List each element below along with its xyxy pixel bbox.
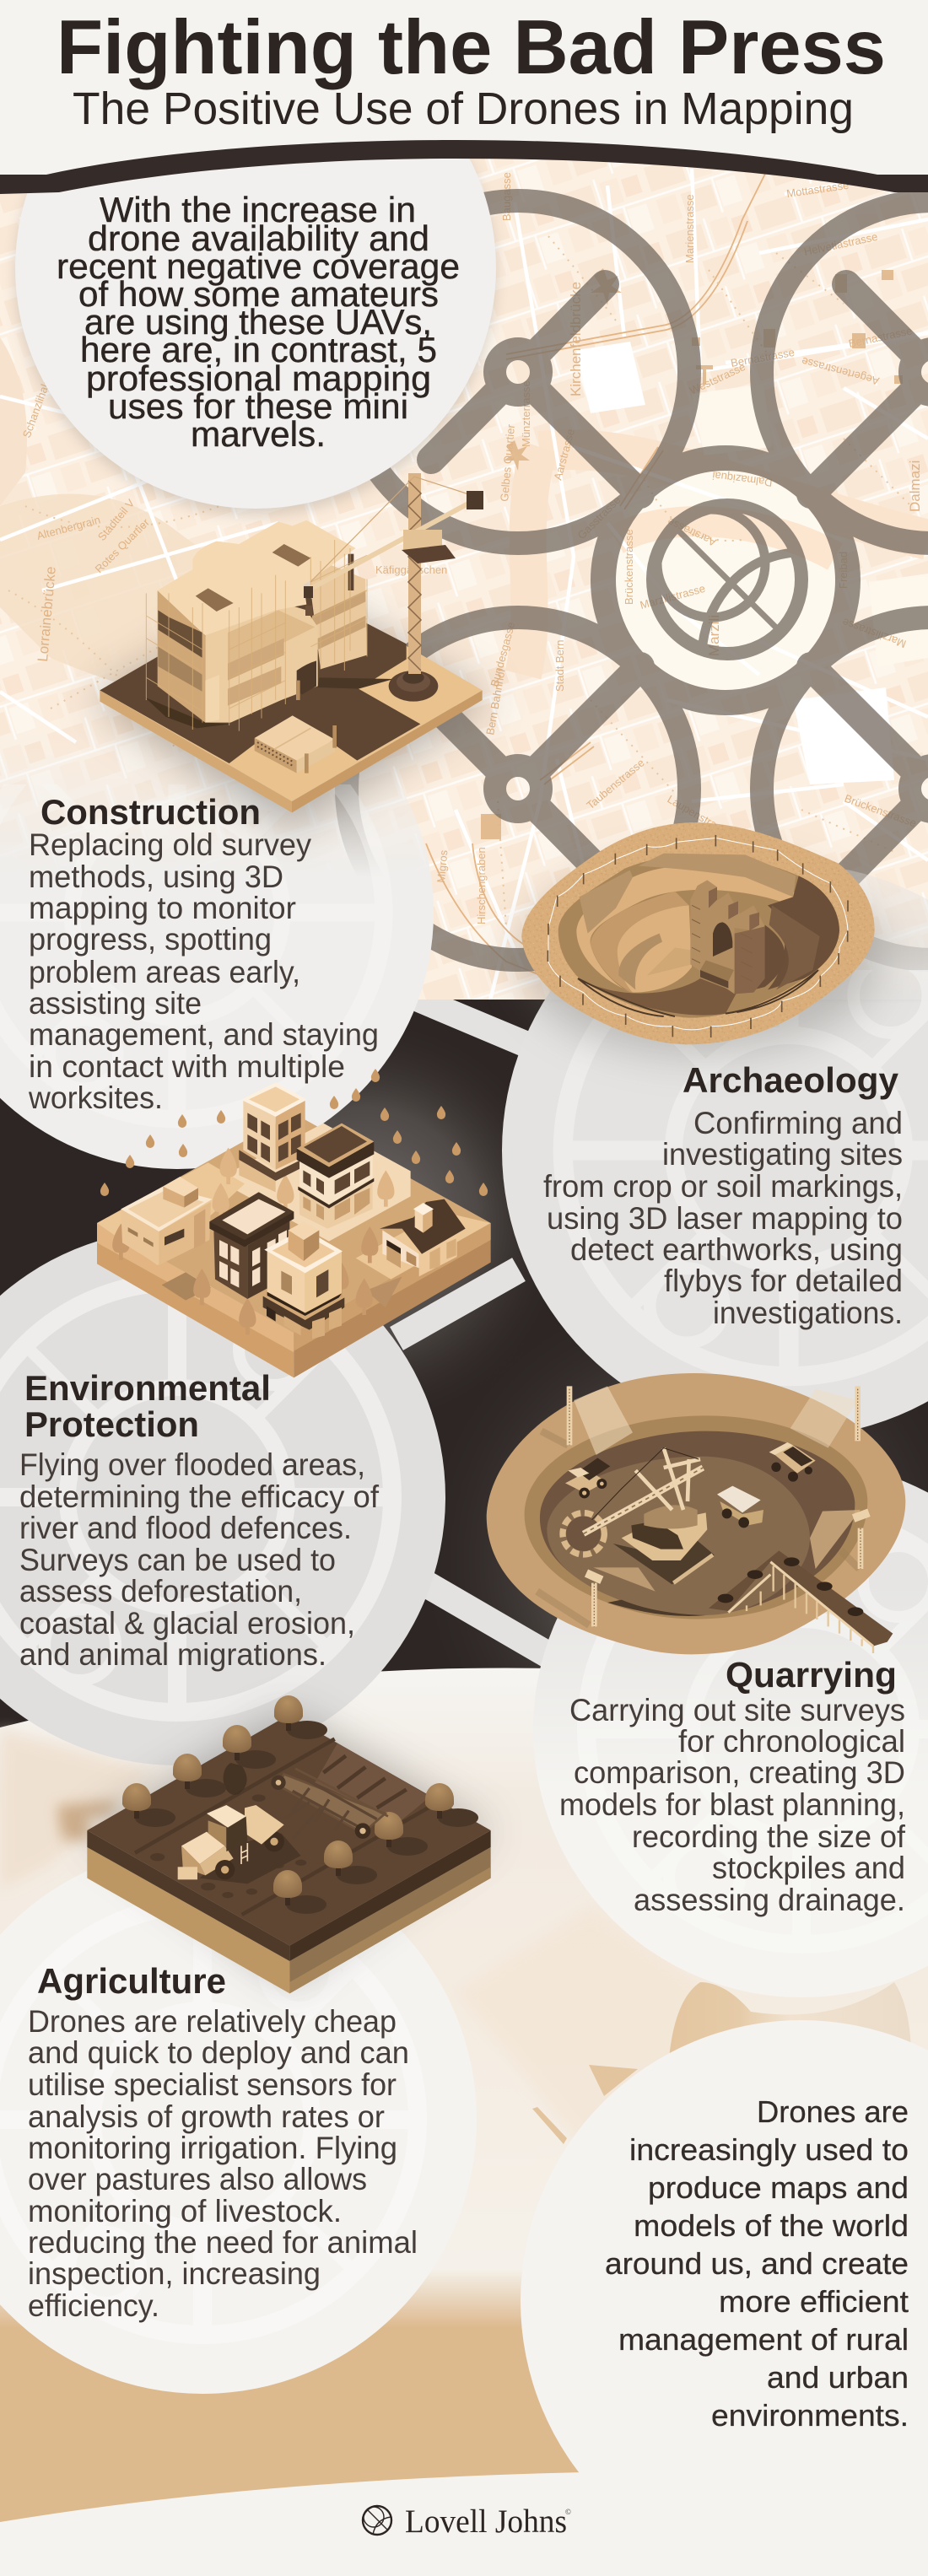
illustration: flooded city [97,1069,491,1377]
environmental protection body text [19,1447,380,1672]
raindrops [100,1069,488,1196]
quarrying body text [559,1693,906,1917]
archaeology body text: using 3D laser mapping to [547,1201,903,1236]
agriculture body text: efficiency. [28,2288,159,2323]
construction body text: progress, spotting [29,922,272,957]
tractor [178,1805,284,1879]
construction body text: problem areas early, [29,955,300,989]
city map backdrop: Laupenstrasse [665,793,734,839]
city map backdrop: Freibad [837,552,850,589]
quarrying body text: stockpiles and [712,1851,905,1885]
closing statement text: models of the world [634,2208,909,2243]
closing statement text: around us, and create [605,2246,909,2281]
city map backdrop: Aarstrasse [551,428,577,482]
closing statement text: increasingly used to [629,2132,909,2167]
environmental protection body text: determining the efficacy of [19,1479,380,1514]
city map backdrop: Altenbergrain [35,513,101,542]
city map backdrop: Käfiggässchen [375,563,447,576]
city map backdrop: Brückenstrasse [623,529,635,605]
environmental protection body text: river and flood defences. [19,1511,352,1545]
city map backdrop: Dalmaziquai [711,469,773,489]
quarrying body text: comparison, creating 3D [574,1755,905,1790]
intro text: here are, in contrast, 5 [80,330,437,369]
city map backdrop: Gasstrasse [575,493,623,542]
environmental protection heading [24,1368,271,1444]
construction body text: mapping to monitor [29,891,296,925]
city map backdrop: Kirchenfeldbrücke [568,282,584,396]
building: tall tower [239,1082,306,1192]
city map backdrop: Rotes Quartier [93,515,152,575]
quarrying heading: Quarrying [726,1655,897,1695]
archaeology body text: flybys for detailed [664,1264,903,1298]
intro text [57,190,460,454]
environmental protection heading: Environmental [24,1368,271,1408]
logo: Lovell Johns: © [565,2508,571,2516]
illustration: archaeological dig [519,822,882,1054]
quarrying body text: Carrying out site surveys [569,1693,905,1727]
city map backdrop: Aegertenstrasse [800,355,881,388]
intro text: of how some amateurs [78,274,439,314]
dark central section [0,1000,928,1847]
closing statement text: Drones are [757,2094,909,2129]
intro text: uses for these mini [108,386,408,426]
intro text: recent negative coverage [57,246,460,286]
city map backdrop: Marzilistrasse [639,582,707,612]
archaeology body text: from crop or soil markings, [543,1169,903,1204]
agriculture body text: monitoring of livestock. [28,2194,342,2228]
building: front block [263,1221,344,1339]
quarrying body text: assessing drainage. [634,1883,905,1917]
panel: quarrying circle [533,1461,928,1997]
city map backdrop: Dalmazi [907,461,923,512]
header panel above the curve [0,0,928,175]
city map backdrop: Marzilistrasse [840,616,908,650]
construction body text: methods, using 3D [29,860,283,894]
construction body text: assisting site [29,986,202,1021]
city map backdrop: Bernastrasse [848,324,914,350]
panel: closing statement circle [521,2020,928,2576]
archaeology body text: Confirming and [693,1106,903,1140]
city map backdrop: Lorrainebrücke [35,566,59,662]
city map backdrop: Migros [434,849,450,883]
bottom footer band [0,2472,928,2576]
drone silhouette over the map [347,201,928,960]
intro text: drone availability and [88,218,429,258]
environmental protection body text: Surveys can be used to [19,1543,336,1577]
construction body text: management, and staying [29,1017,379,1052]
panel: construction circle [0,773,434,1169]
panel: agriculture circle [0,1846,477,2394]
archaeology body text: detect earthworks, using [570,1232,903,1267]
city map backdrop: Mottastrasse [785,179,850,200]
closing statement text: environments. [711,2398,909,2433]
closing statement text: produce maps and [648,2170,909,2205]
intro text: marvels. [191,414,326,454]
floodlight towers [569,1386,869,1626]
lower cream section with aerial photo wash [0,1668,928,2576]
agriculture body text: reducing the need for animal [28,2225,418,2260]
city map backdrop: Bernastrasse [730,346,796,369]
intro text: are using these UAVs, [84,302,432,342]
construction body text: worksites. [28,1081,163,1115]
illustration: construction site [91,473,491,831]
panel: intro circle [15,28,496,515]
city map backdrop: Schanzlihalde [20,371,56,439]
agriculture body text: utilise specialist sensors for [28,2067,397,2102]
excavator [563,1448,715,1584]
harrow [271,1769,388,1839]
illustration: agricultural field [87,1695,491,1993]
construction heading: Construction [40,792,261,832]
closing statement text: and urban [767,2360,909,2395]
agriculture body text: monitoring irrigation. Flying [28,2131,397,2165]
agriculture body text: Drones are relatively cheap [28,2004,397,2039]
archaeology body text [543,1106,903,1330]
quarrying body text: recording the size of [632,1819,906,1854]
city map backdrop: Bundesgasse [488,621,517,688]
archaeology body text: investigations. [713,1296,903,1330]
building: dark roof block [297,1124,374,1229]
city map backdrop: Gelbes Quartier [498,423,517,502]
environmental protection body text: coastal & glacial erosion, [19,1606,355,1641]
city map backdrop: Aarstrasse [666,515,718,549]
agriculture body text: and quick to deploy and can [28,2035,409,2070]
quarrying body text: for chronological [678,1724,905,1759]
construction body text [28,827,379,1115]
city map backdrop: Bern Bahnhof [483,667,508,736]
city map backdrop: Baugasse [500,172,513,221]
quarrying body text: models for blast planning, [559,1787,905,1822]
building: dark frame block [209,1192,294,1299]
city map backdrop: Münzterrasse [520,380,532,447]
environmental protection body text: and animal migrations. [19,1637,326,1672]
subtitle: The Positive Use of Drones in Mapping [73,84,854,134]
city map backdrop: Stadtteil V [95,497,138,543]
city map backdrop: Helvetiastrasse [803,230,879,258]
environmental protection body text: Flying over flooded areas, [19,1447,365,1482]
construction body text: in contact with multiple [29,1049,345,1084]
dark curved divider [0,140,928,194]
floodlight beams [537,1386,861,1625]
environmental protection body text: assess deforestation, [19,1574,302,1609]
city map backdrop: Hirschengraben [475,847,488,924]
city map backdrop: Weststrasse [688,360,747,397]
mining trucks [565,1442,816,1528]
intro text: professional mapping [86,358,431,398]
intro text: With the increase in [100,190,416,229]
city map backdrop: Brückenstrasse [843,792,918,829]
panel: archaeology circle [502,864,928,1437]
closing statement text [605,2094,909,2433]
closing statement text: management of rural [618,2322,909,2357]
archaeology heading: Archaeology [683,1060,899,1100]
environmental protection heading: Protection [24,1404,199,1444]
closing statement text: more efficient [719,2284,909,2319]
crane [304,473,483,674]
construction body text: Replacing old survey [29,827,311,862]
city map backdrop [0,152,928,1004]
agriculture body text: analysis of growth rates or [28,2099,385,2134]
agriculture body text: over pastures also allows [28,2162,367,2196]
illustration: quarry [487,1373,905,1654]
title: Fighting the Bad Press [57,5,886,90]
building: low left block [121,1177,213,1265]
archaeology body text: investigating sites [662,1137,903,1172]
agriculture body text [28,2004,418,2323]
city map backdrop: Marienstrasse [683,194,696,263]
city map backdrop: Taubenstrasse [584,756,647,811]
city map backdrop: Marzili [706,615,722,656]
city map backdrop: Stadt Bern [553,640,566,692]
panel: environmental protection circle [0,1229,445,1765]
conveyor [709,1550,893,1653]
agriculture heading: Agriculture [37,1961,226,2001]
building: house [380,1199,466,1276]
agriculture body text: inspection, increasing [28,2256,321,2291]
logo: Lovell Johns: Lovell Johns [405,2503,567,2540]
